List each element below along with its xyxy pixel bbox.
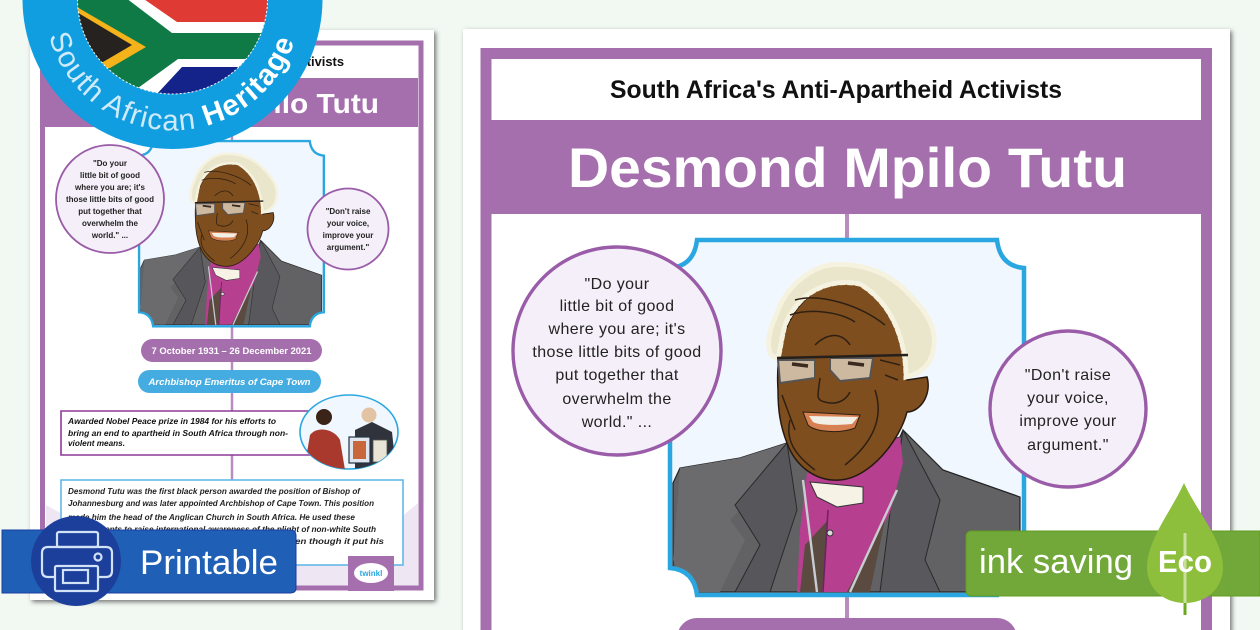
small poster award box: bring an end to apartheid in South Africa through non- — [68, 428, 288, 438]
small poster quote bubble right: your voice, — [327, 219, 369, 228]
large poster quote bubble left: "Do your — [585, 276, 650, 293]
small poster quote bubble right: argument." — [327, 243, 369, 252]
badge flag ring — [78, 0, 268, 94]
small poster portrait — [139, 141, 324, 326]
small poster date pill — [141, 339, 322, 362]
small poster quote bubble left: those little bits of good — [66, 195, 154, 204]
small poster role pill — [138, 370, 321, 393]
eco label: Eco — [1158, 544, 1212, 579]
large poster quote bubble left — [513, 247, 721, 455]
small poster award photo — [300, 395, 398, 470]
large poster quote bubble left: where you are; it's — [548, 321, 685, 338]
small poster decorative footer — [46, 503, 418, 588]
printable label: Printable — [140, 544, 278, 582]
large poster quote bubble left: little bit of good — [560, 298, 674, 315]
large poster sheet — [463, 29, 1230, 630]
printable band — [2, 530, 296, 593]
large poster quote bubble right: argument." — [1027, 437, 1109, 454]
large poster quote bubble right: your voice, — [1027, 390, 1109, 407]
panel: small poster preview — [30, 30, 434, 600]
large poster timeline line — [845, 214, 849, 630]
large poster quote bubble left: those little bits of good — [532, 344, 702, 361]
small poster sheet — [30, 30, 434, 600]
large poster subheading: South Africa's Anti-Apartheid Activists — [610, 76, 1062, 104]
icon: printer — [31, 516, 121, 606]
small poster quote bubble left: "Do your — [93, 159, 127, 168]
small poster purple border — [42, 43, 421, 588]
small poster award box: Awarded Nobel Peace prize in 1984 for his efforts to — [67, 416, 276, 426]
icon: leaf drop — [1147, 483, 1223, 615]
badge disc — [22, 0, 322, 149]
large poster title band — [491, 120, 1201, 214]
large poster quote bubble left: put together that — [555, 367, 679, 384]
small poster role pill: Archbishop Emeritus of Cape Town — [147, 377, 311, 388]
large poster date pill — [677, 618, 1017, 630]
small poster info box: Africans and to call for international sanctions, even though it put his — [67, 536, 384, 546]
small poster quote bubble left: world." ... — [91, 231, 128, 240]
small poster timeline line — [231, 127, 233, 480]
badge: ink saving Eco — [966, 483, 1260, 615]
small poster award box: violent means. — [68, 438, 125, 448]
small poster quote bubble right: "Don't raise — [326, 207, 371, 216]
large poster quote bubble left: overwhelm the — [562, 391, 672, 408]
small poster info box: appointments to raise international awareness of the plight of non-white South — [68, 524, 376, 534]
badge: South African Heritage — [22, 0, 322, 149]
large poster quote bubble right: "Don't raise — [1025, 367, 1111, 384]
small poster info box — [61, 480, 403, 565]
small poster title band — [45, 78, 418, 127]
badge text: South African Heritage — [50, 32, 293, 131]
small poster info box: Desmond Tutu was the first black person awarded the position of Bishop of — [68, 486, 361, 496]
large poster quote bubble left: world." ... — [581, 414, 652, 431]
ink saving label: ink saving — [979, 543, 1133, 581]
small poster quote bubble left: where you are; it's — [74, 183, 146, 192]
small poster title: Desmond Mpilo Tutu — [86, 88, 379, 119]
small poster award box — [61, 411, 315, 455]
icon: South African flag — [78, 0, 268, 94]
small poster quote bubble left: little bit of good — [80, 171, 140, 180]
panel: large poster preview — [463, 29, 1230, 630]
large poster quote bubble right — [990, 331, 1146, 487]
small poster subheading: South Africa's Anti-Apartheid Activists — [108, 54, 344, 69]
small poster quote bubble left: put together that — [78, 207, 142, 216]
large poster purple border — [486, 54, 1206, 630]
small poster quote bubble right: improve your — [323, 231, 373, 240]
large poster portrait — [670, 240, 1024, 595]
small poster logo: twinkl — [360, 569, 382, 578]
small poster info box: Johannesburg and was later appointed Archbishop of Cape Town. This position — [68, 498, 374, 508]
small poster quote bubble left: overwhelm the — [82, 219, 139, 228]
small poster quote bubble right — [308, 188, 388, 270]
eco band — [966, 531, 1260, 596]
small poster date pill: 7 October 1931 – 26 December 2021 — [152, 346, 312, 357]
large poster title: Desmond Mpilo Tutu — [568, 136, 1127, 199]
large poster quote bubble right: improve your — [1019, 413, 1117, 430]
small poster info box: made him the head of the Anglican Church in South Africa. He used these — [68, 512, 355, 522]
badge: Printable — [2, 516, 296, 606]
small poster quote bubble left — [56, 145, 164, 253]
small poster logo — [348, 556, 394, 591]
